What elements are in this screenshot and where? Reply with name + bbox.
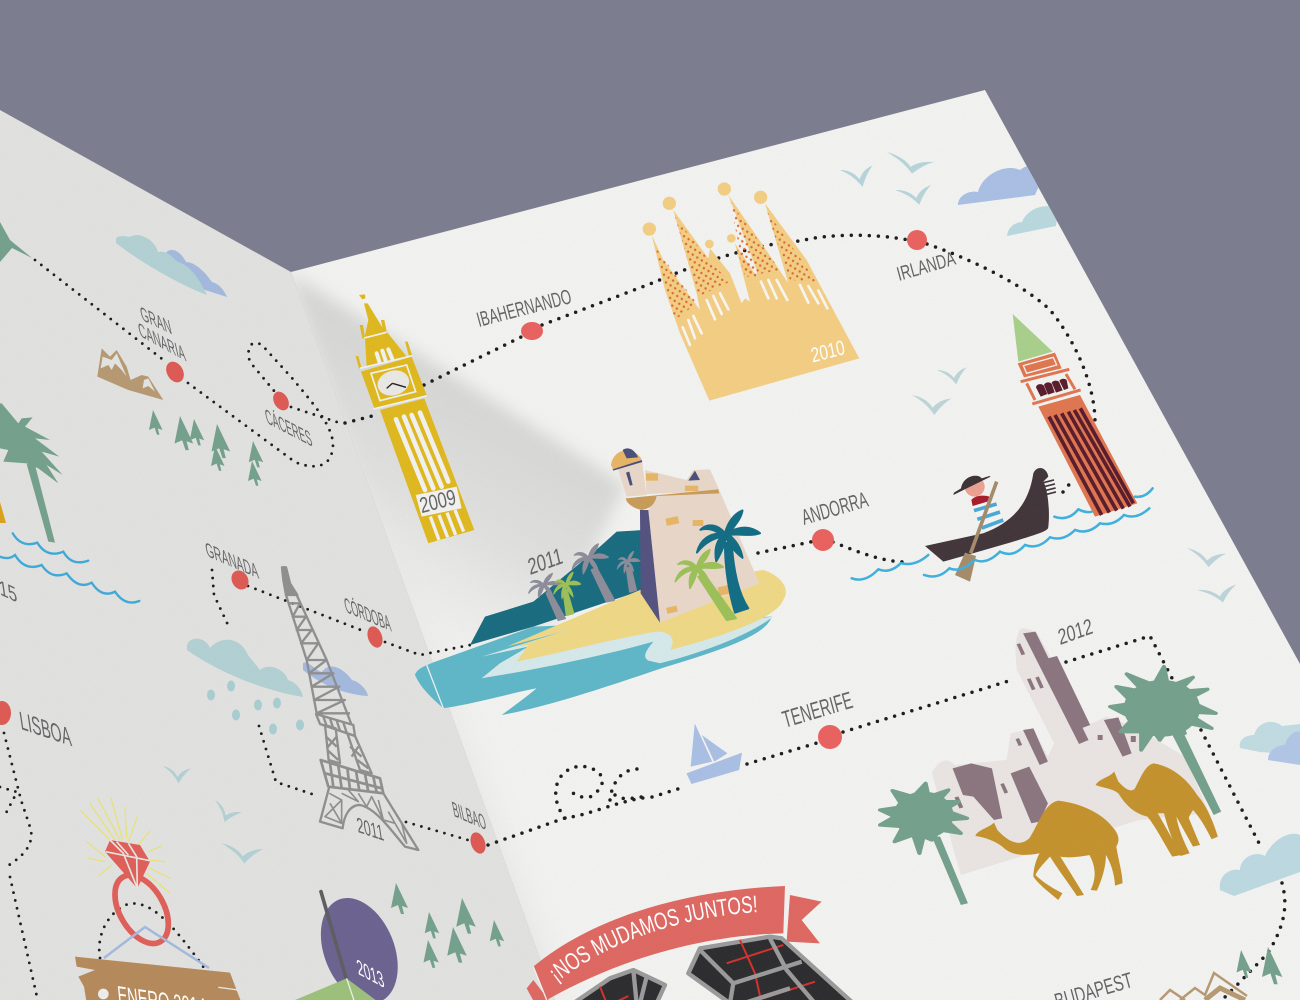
clouds: lower right — [1220, 722, 1300, 896]
birds: top right — [840, 152, 934, 208]
label: TENERIFE: TENERIFE — [780, 687, 856, 734]
trees: lower right — [1236, 947, 1282, 984]
icon: island with fortress — [415, 448, 786, 715]
banner: nos mudamos juntos — [526, 886, 822, 1000]
town — [932, 628, 1210, 875]
labels: left page: GRANADA — [203, 538, 260, 584]
waves: left — [0, 533, 139, 603]
trees: left upper — [149, 410, 263, 486]
fold shadow — [294, 276, 624, 626]
labels: left page: GRAN — [138, 302, 174, 339]
near palm — [932, 837, 968, 905]
palms — [529, 544, 640, 620]
waves: right water — [852, 488, 1153, 580]
sand — [507, 570, 786, 662]
fortress body — [645, 469, 720, 494]
route: right page top — [345, 235, 1285, 1000]
label: ANDORRA: ANDORRA — [799, 487, 871, 530]
labels: left page: CANARIA — [136, 319, 188, 366]
birds: left lower — [162, 766, 263, 866]
route stops: left page — [0, 358, 488, 856]
panel: right page — [291, 90, 1300, 1000]
foam — [482, 617, 773, 678]
labels: left page: CÁCERES — [263, 404, 314, 452]
icon: mountains lower right — [1160, 973, 1247, 1000]
label: IBAHERNANDO: IBAHERNANDO — [474, 285, 574, 332]
route stops: right page — [521, 230, 927, 749]
sign: Enero 2014 — [75, 957, 242, 1000]
labels: left page — [0, 302, 488, 846]
icon: campanile — [1013, 314, 1137, 517]
cloud: rain — [187, 639, 368, 734]
label: IRLANDA: IRLANDA — [895, 248, 958, 286]
far palm — [1168, 727, 1221, 815]
label: 2011 island: 2011 — [525, 542, 565, 580]
yellow fragment at left — [0, 502, 6, 523]
icon: gondola — [925, 468, 1056, 582]
gondolier — [953, 476, 1004, 582]
icon: left palm — [0, 403, 63, 543]
icon: sign hanger — [104, 927, 209, 968]
birds: near campanile — [910, 367, 968, 416]
panel: left page — [0, 110, 555, 1000]
icon: sailboat — [686, 723, 742, 784]
route: left page — [0, 260, 470, 997]
route: Tenerife — [843, 679, 1015, 732]
labels: left page: 2011 — [355, 812, 385, 846]
birds: right — [1185, 548, 1238, 606]
banner text: ¡NOS MUDAMOS JUNTOS! — [550, 896, 756, 984]
label: 2012: 2012 — [1056, 613, 1095, 650]
text: BILBAO — [450, 796, 488, 835]
label: 2010: 2010 — [809, 336, 847, 368]
icon: diamond ring — [81, 797, 179, 953]
label: 2009: 2009 — [417, 484, 458, 518]
route: Andorra — [758, 541, 815, 553]
icon: Sagrada Familia — [643, 182, 859, 401]
mountains: left — [97, 348, 163, 400]
icon: Eiffel tower — [282, 567, 418, 850]
hill — [470, 530, 643, 645]
left palm top — [0, 222, 32, 262]
icon: KIO towers — [573, 937, 853, 1000]
labels: left page: CÓRDOBA — [342, 592, 393, 636]
clouds: top right — [958, 165, 1058, 236]
rain drops — [207, 680, 304, 734]
labels: left page: LISBOA — [17, 705, 74, 752]
icon: Big Ben — [356, 294, 474, 543]
icon: tent 2013 — [295, 887, 412, 1000]
water — [415, 617, 772, 715]
cloud: left top — [116, 235, 227, 297]
trees: lower centre — [391, 883, 504, 968]
icon: desert town with camels — [880, 628, 1221, 905]
camels — [975, 763, 1218, 900]
